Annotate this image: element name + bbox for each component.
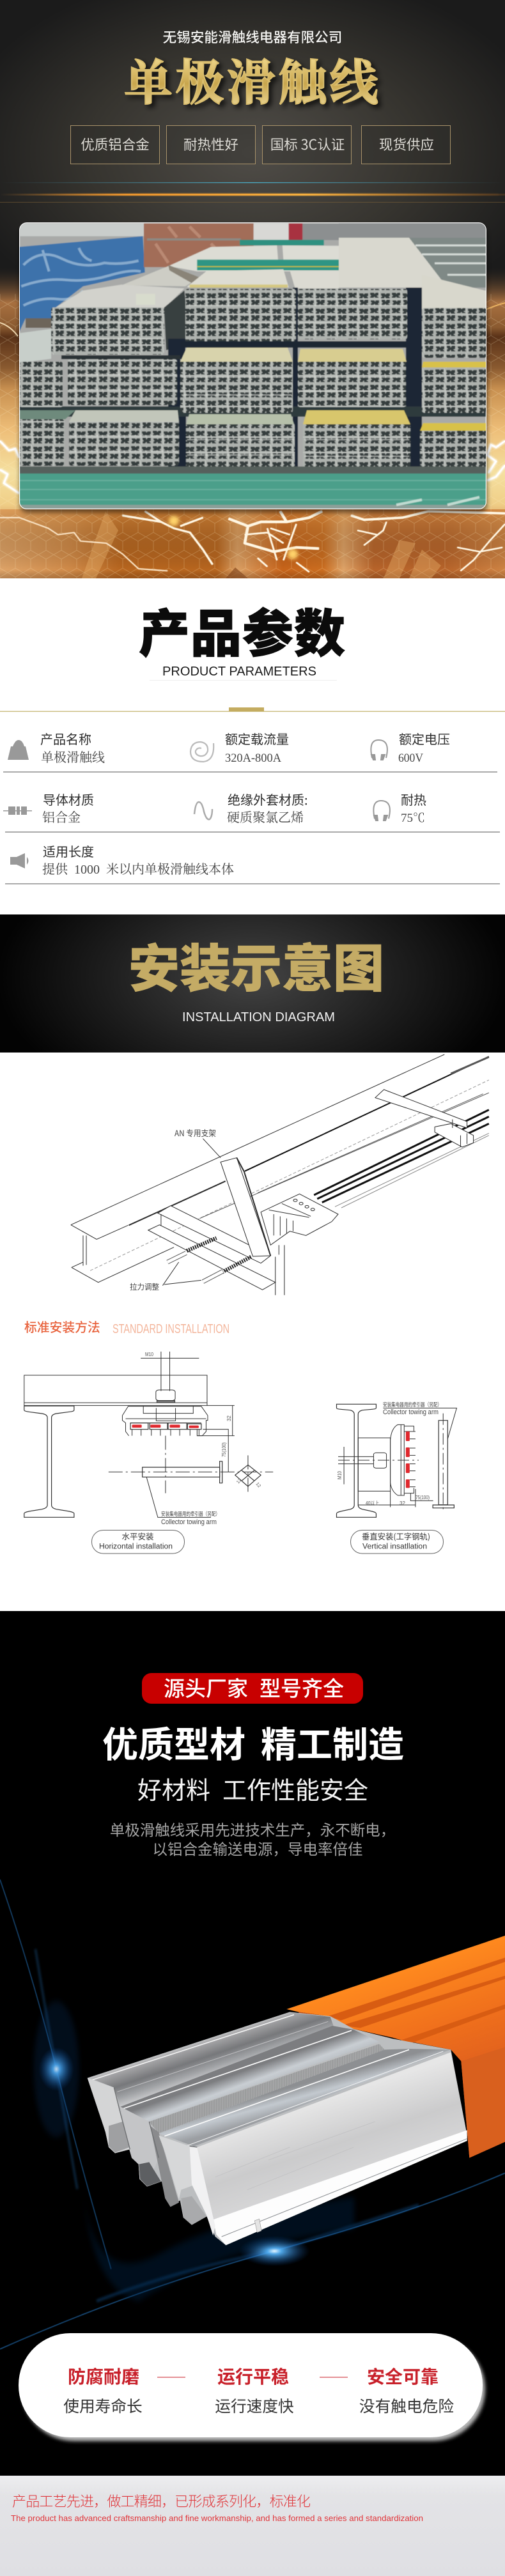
pill: horizontal installation: Horizontal installation: [99, 1543, 173, 1550]
description: [110, 1818, 395, 1859]
tag: in stock: [362, 125, 450, 164]
pill: vertical installation: 垂直安装(工字钢轨): [362, 1530, 430, 1542]
pill: vertical installation: [350, 1530, 444, 1554]
parameter: applicable length: [42, 842, 234, 877]
labels: dimensions: 32: [226, 1415, 232, 1421]
parameter: conductor material: 导体材质: [43, 790, 94, 808]
pill: vertical installation: Vertical insatllation: [362, 1543, 427, 1550]
parameter: insulation material: 硬质聚氯乙烯: [227, 810, 304, 825]
pill: horizontal installation: [92, 1530, 184, 1554]
parameter: product name: 产品名称: [40, 729, 91, 748]
parameter: rated voltage: 600V: [398, 752, 423, 765]
parameter: rated current: 额定载流量: [225, 729, 289, 748]
benefit: safe and reliable: 安全可靠: [367, 2363, 439, 2389]
labels: vertical dimensions: 32: [400, 1500, 405, 1506]
parameter: applicable length: 提供 1000 米以内单极滑触线本体: [42, 862, 234, 877]
installation heading: 安装示意图: [128, 928, 384, 1002]
badge: source factory: 源头厂家: [164, 1672, 248, 1702]
parameter: heat resistance: 75℃: [401, 812, 425, 825]
labels: vertical dimensions: M10: [337, 1471, 343, 1479]
lightning: [0, 511, 505, 572]
description: 单极滑触线采用先进技术生产，永不断电，: [110, 1818, 395, 1840]
tag: aluminium alloy: [70, 125, 160, 164]
benefit: safe and reliable: [359, 2363, 454, 2417]
parameter: product name: [40, 729, 105, 765]
benefit: stable running: 运行平稳: [217, 2363, 289, 2389]
parameter: conductor material: [42, 790, 94, 825]
label: towing arm vertical: Collector towing arm: [383, 1408, 439, 1416]
icon: spiral: [190, 742, 214, 762]
panel: product parameters: [0, 593, 505, 884]
tag: aluminium alloy: 优质铝合金: [81, 134, 150, 154]
tag: heat resistance: [166, 125, 256, 164]
label: towing arm: Collector towing arm: [161, 1518, 217, 1526]
parameter: rated voltage: [398, 729, 450, 765]
parameters heading: 产品参数: [139, 593, 346, 667]
pill: horizontal installation: 水平安装: [121, 1530, 154, 1542]
installation subheading: INSTALLATION DIAGRAM: [182, 1010, 335, 1024]
badge: source factory: 型号齐全: [260, 1672, 344, 1702]
description: 以铝合金输送电源，导电率倍佳: [152, 1837, 363, 1859]
parameter: rated voltage: 额定电压: [399, 729, 450, 748]
footer chinese text: 产品工艺先进，做工精细，已形成系列化，标准化: [12, 2490, 311, 2511]
image: aluminium conductor with orange housing: [88, 1936, 505, 2245]
labels: dimensions: 12: [254, 1482, 261, 1488]
parameter: product name: 单极滑触线: [41, 750, 105, 765]
tag: 3C certified: [262, 125, 352, 164]
subheadline: 好材料: [137, 1771, 210, 1806]
streak lines: [0, 182, 505, 203]
icon: speaker: [10, 853, 28, 868]
label: AN bracket: AN 专用支架: [175, 1127, 216, 1139]
parameter: rated current: 320A-800A: [225, 752, 281, 765]
parameter: conductor material: 铝合金: [42, 810, 81, 825]
parameter: insulation material: [227, 790, 308, 825]
subheadline: 工作性能安全: [222, 1771, 368, 1806]
standard installation heading: [24, 1317, 229, 1336]
parameter: applicable length: 适用长度: [43, 842, 94, 860]
benefit: stable running: [215, 2363, 294, 2417]
headline: 优质型材: [102, 1716, 245, 1768]
drawing: horizontal installation: [24, 1352, 273, 1554]
label: towing arm: 安装集电器用的牵引器（另配）: [161, 1510, 220, 1518]
tag: 3C certified: 国标 3C认证: [270, 134, 345, 154]
headline: 精工制造: [261, 1716, 404, 1768]
icon: headphones rated voltage: [371, 740, 387, 760]
label: towing arm vertical: 安装集电器用的牵引器（另配）: [383, 1401, 442, 1408]
panel: product feature section: [0, 1611, 505, 2476]
parameter: rated current: [225, 729, 289, 765]
benefit: safe and reliable: 没有触电危险: [359, 2394, 454, 2417]
parameter: heat resistance: 耐热: [401, 790, 426, 808]
benefit: stable running: 运行速度快: [215, 2394, 294, 2417]
company name: 无锡安能滑触线电器有限公司: [163, 27, 342, 47]
product title: 单极滑触线: [124, 57, 381, 111]
icon: sine wave: [194, 802, 212, 819]
parameter: heat resistance: [401, 790, 426, 825]
label: towing arm vertical: [383, 1401, 442, 1416]
lens flares: [0, 1879, 505, 2349]
standard installation heading: 标准安装方法: [24, 1317, 100, 1336]
product photo: stacked aluminium bars: [19, 222, 486, 509]
icon: headphones heat: [373, 801, 390, 821]
label: towing arm: [161, 1510, 220, 1526]
icon: conductor: [3, 806, 32, 815]
labels: dimensions: 75(100): [221, 1442, 227, 1457]
labels: vertical dimensions: [337, 1471, 430, 1507]
labels: dimensions: M10: [145, 1352, 153, 1357]
benefit: corrosion resistance: 防腐耐磨: [68, 2363, 139, 2389]
tag: heat resistance: 耐热性好: [183, 134, 238, 154]
benefit: corrosion resistance: [63, 2363, 143, 2417]
tag: in stock: 现货供应: [379, 134, 434, 154]
feature tags: [70, 125, 450, 164]
footer english text: The product has advanced craftsmanship and fine workmanship, and has formed a series and standardization: [11, 2513, 423, 2523]
panel: standard installation: [24, 1317, 456, 1554]
standard installation heading: STANDARD INSTALLATION: [113, 1322, 229, 1336]
badge: source factory: [142, 1672, 363, 1704]
drawing: vertical installation: [336, 1401, 456, 1554]
labels: vertical dimensions: 40以上: [366, 1500, 379, 1507]
label: tension adjustment: 拉力调整: [130, 1281, 159, 1292]
benefit: corrosion resistance: 使用寿命长: [63, 2394, 143, 2417]
parameters subheading: PRODUCT PARAMETERS: [162, 665, 316, 679]
panel: hero banner: [0, 0, 505, 578]
panel: footer note: [0, 2476, 505, 2576]
icon: bag: [8, 740, 29, 760]
labels: vertical dimensions: 75(100): [416, 1495, 430, 1500]
parameter: insulation material: 绝缘外套材质:: [228, 790, 308, 808]
labels: dimensions: [145, 1352, 261, 1488]
diagram: isometric installation: [71, 1054, 489, 1295]
panel: benefits capsule: [19, 2333, 485, 2441]
panel: installation diagram header: [0, 914, 505, 1053]
labels: dimensions: 12: [236, 1478, 243, 1485]
